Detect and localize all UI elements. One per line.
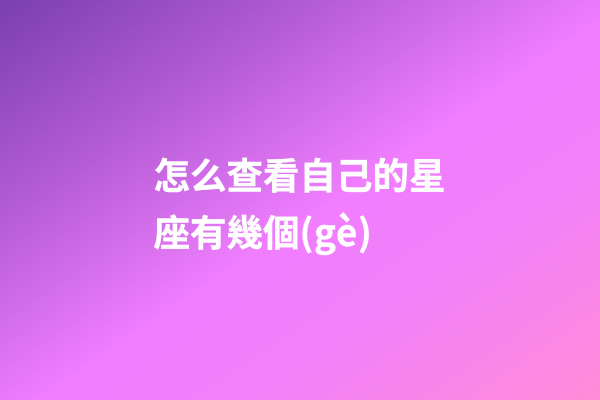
- title: 座有幾個(gè): [154, 204, 373, 257]
- title: 怎么查看自己的星: [154, 147, 446, 200]
- title: [154, 147, 446, 257]
